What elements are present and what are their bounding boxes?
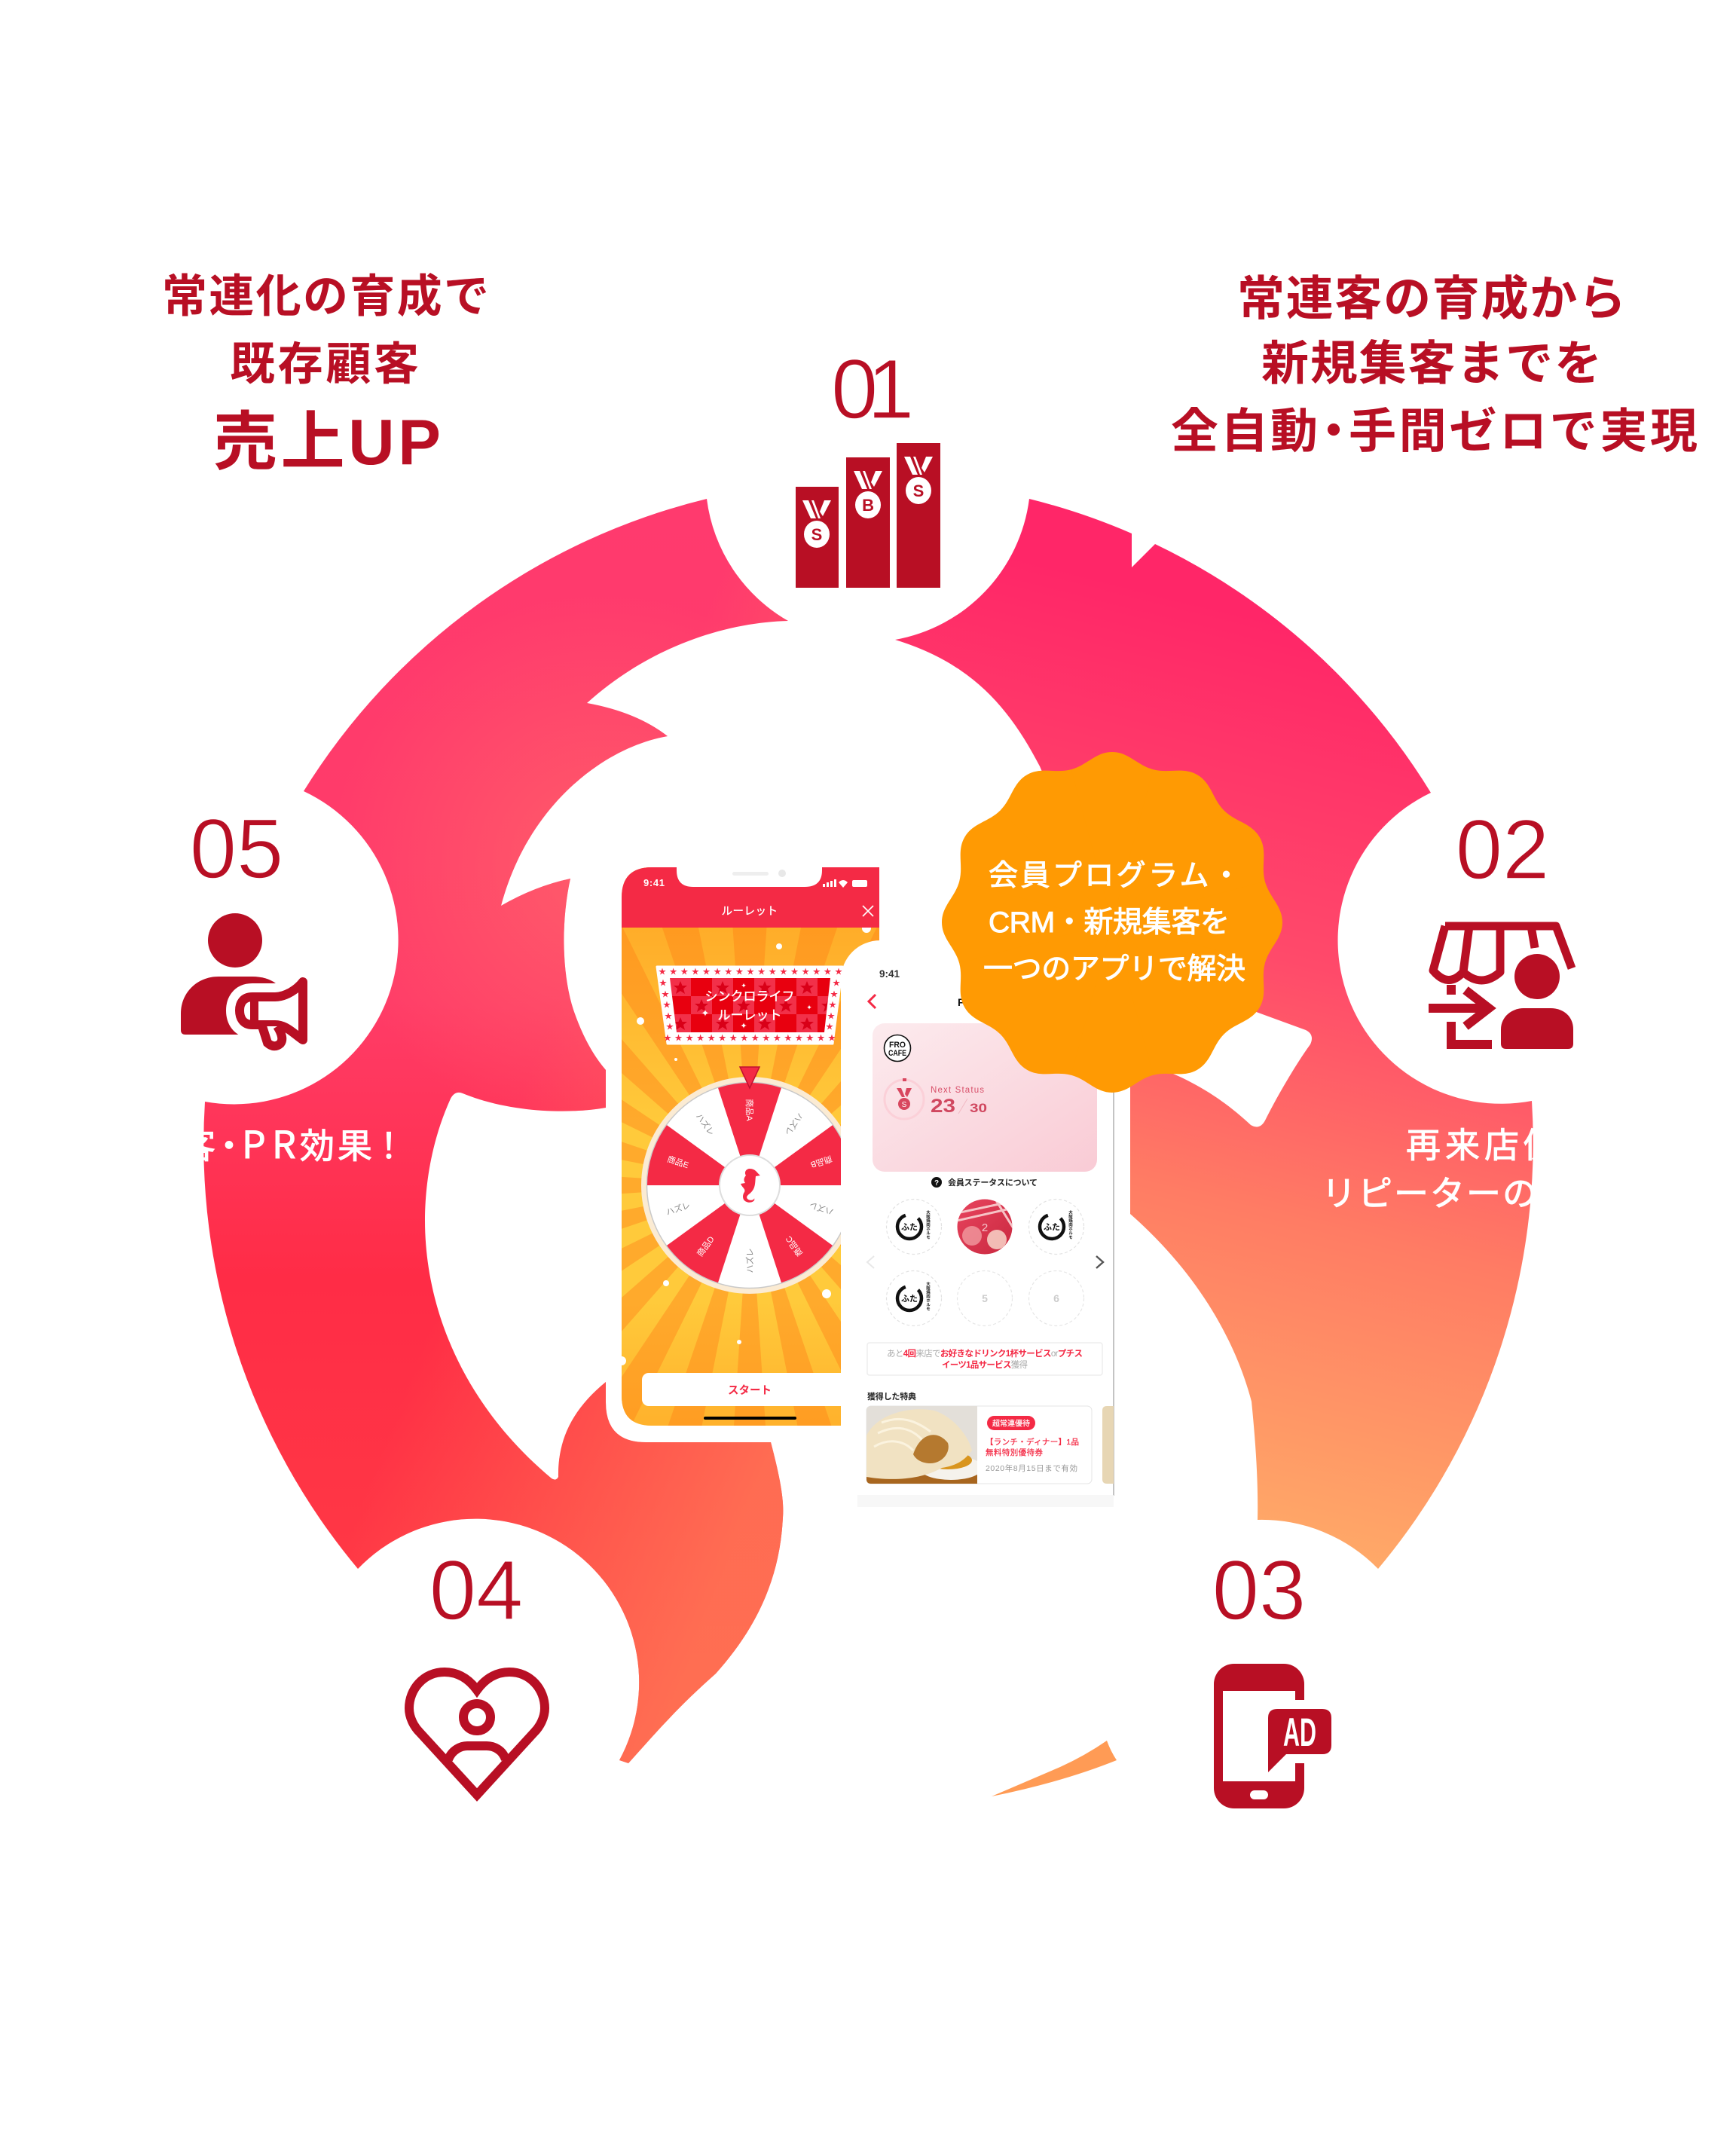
white label: repeat visit promotion: リピーターの獲得	[1322, 1174, 1611, 1213]
number 02: 02	[1456, 802, 1549, 897]
orange scalloped badge	[942, 752, 1282, 1093]
orange scalloped badge: CRM・新規集客を	[989, 906, 1230, 939]
orange scalloped badge: 一つのアプリで解決	[983, 953, 1245, 986]
number 04: 04	[429, 1543, 523, 1637]
right ring segment	[895, 499, 1533, 1569]
stamp 6: 6	[1053, 1292, 1059, 1304]
coupon card: 無料特別優待券	[986, 1448, 1043, 1457]
roulette background sunburst	[622, 867, 879, 1426]
stamp 6	[1029, 1270, 1083, 1326]
edge dot	[617, 1356, 626, 1365]
roulette banner: ★	[830, 991, 838, 999]
coupon expiry: 2020年8月15日まで有効	[986, 1463, 1077, 1473]
stamp 2 photo	[957, 1198, 1013, 1254]
shop logo: FRO	[889, 1041, 906, 1050]
roulette banner: ★	[663, 1001, 671, 1010]
phone white body	[841, 940, 1114, 1537]
hidden screen title: FRO CAFE	[958, 996, 1012, 1008]
heading: regular customer growth: 常連化の育成で	[162, 271, 489, 322]
phone: member status screen	[841, 940, 1114, 1537]
roulette wheel: ハズレ	[782, 1111, 805, 1138]
roulette wheel: ハズレ	[694, 1111, 717, 1138]
heading: automation message	[1171, 273, 1698, 458]
roulette banner: ✦	[740, 1022, 747, 1031]
medal B: B	[862, 496, 874, 515]
next coupon peek	[1102, 1406, 1114, 1484]
benefits heading: 獲得した特典	[867, 1391, 916, 1402]
heading: regular customer growth	[162, 271, 489, 478]
number 01: 01	[831, 342, 914, 436]
medal S high	[904, 457, 933, 504]
white label: new customers and PR effect	[68, 1115, 406, 1169]
home indicator	[704, 1417, 796, 1420]
medal B	[854, 471, 882, 518]
stamp 3	[1029, 1200, 1083, 1254]
roulette wheel: 商品C	[784, 1234, 805, 1258]
back chevron	[869, 995, 876, 1008]
orange sliver at bottom	[992, 1741, 1117, 1796]
medal S low	[802, 500, 831, 548]
white label: new customers and PR effect: 新規集客	[68, 1127, 219, 1166]
stamp 1: ふた	[901, 1222, 918, 1232]
coupon title: 【ランチ・ディナー】1品	[986, 1437, 1079, 1447]
icon: medal podium	[796, 443, 940, 588]
roulette header	[622, 867, 879, 928]
coupon card	[866, 1406, 1092, 1484]
status help link: 会員ステータスについて	[948, 1177, 1038, 1188]
roulette wheel: ハズレ	[665, 1200, 692, 1218]
icon: store visit	[1429, 926, 1573, 1049]
number 05: 05	[190, 802, 283, 896]
bottom navigation strip	[857, 1495, 1114, 1507]
icon: person with megaphone	[181, 913, 303, 1046]
phone right edge line	[1113, 1055, 1114, 1496]
shop logo	[885, 1035, 910, 1061]
heading: regular customer growth: 既存顧客	[230, 339, 419, 390]
phone: roulette screen	[622, 867, 879, 1426]
start button	[642, 1373, 891, 1406]
heading: regular customer growth: 売上UP	[213, 407, 441, 478]
medal S high: S	[913, 481, 924, 500]
stamp 4: ふた	[901, 1294, 918, 1304]
previous chevron	[867, 1256, 874, 1268]
heading: automation message: 手間ゼロで実現	[1349, 405, 1698, 458]
roulette banner	[657, 967, 842, 1044]
coupon food photo	[866, 1406, 983, 1484]
status help link: ?	[934, 1179, 939, 1188]
icon: phone advertisement: AD	[1283, 1710, 1316, 1755]
roulette banner: ★	[666, 1023, 674, 1032]
status medal ring: S	[902, 1101, 907, 1109]
infographic canvas	[165, 273, 1697, 1808]
heading: automation message: 全自動	[1171, 405, 1318, 458]
stamp 3: 大阪焼肉ホルモ	[1068, 1209, 1073, 1240]
white arrow notch in right segment	[1130, 980, 1312, 1127]
shop logo: CAFE	[888, 1049, 906, 1058]
number 03: 03	[1212, 1543, 1306, 1637]
status count: 30	[970, 1101, 987, 1115]
stamp 4: 大阪焼肉ホルモ	[925, 1281, 931, 1311]
notch	[677, 863, 822, 887]
roulette banner: ✦	[806, 1004, 812, 1011]
white label: new customers and PR effect: ・	[212, 1127, 246, 1166]
white label: new customers and PR effect: 効果！	[300, 1127, 406, 1166]
start button: スタート	[728, 1384, 772, 1397]
roulette banner: ★	[826, 1023, 833, 1032]
roulette banner: ★	[665, 1013, 672, 1021]
wheel pointer	[740, 1067, 760, 1088]
stamp 3: ふた	[1044, 1222, 1060, 1232]
status icons	[823, 879, 867, 888]
heading: automation message: 新規集客までを	[1261, 338, 1602, 390]
stamp 5: 5	[982, 1292, 988, 1304]
left ring segment	[203, 499, 788, 1763]
roulette banner: ★	[662, 991, 669, 999]
roulette banner: ★	[827, 1013, 835, 1021]
status count	[931, 1096, 987, 1117]
roulette wheel: 商品B	[809, 1154, 833, 1169]
medal S low: S	[811, 525, 822, 544]
coupon tag: 超常連優待	[992, 1418, 1030, 1429]
heading: automation message: 常連客の育成から	[1237, 273, 1626, 326]
reward info box: イーツ1品サービス獲得	[942, 1359, 1028, 1370]
roulette banner: ★	[829, 1001, 836, 1010]
next chevron	[1096, 1256, 1103, 1268]
screen title: ルーレット	[722, 906, 778, 918]
stamp 5	[957, 1270, 1013, 1326]
roulette wheel: ハズレ	[744, 1248, 755, 1273]
roulette wheel: 商品A	[744, 1099, 754, 1121]
stamp 4	[886, 1270, 942, 1326]
white label: repeat visit promotion: 再来店促進で	[1406, 1126, 1641, 1165]
roulette wheel: 商品D	[695, 1234, 717, 1258]
heading: automation message: ・	[1310, 405, 1358, 458]
stamp 1	[886, 1200, 942, 1254]
roulette banner: ★★★★★★★★★★★★★★★★★	[659, 968, 842, 977]
next status text: Next Status	[931, 1086, 984, 1095]
roulette wheel: ハズレ	[808, 1200, 835, 1218]
stamp 1: 大阪焼肉ホルモ	[925, 1209, 931, 1240]
speaker and camera	[732, 870, 786, 877]
orange scalloped badge: 会員プログラム・	[989, 860, 1241, 892]
roulette wheel: 商品E	[666, 1154, 690, 1170]
stamp 2 photo: 2	[982, 1221, 988, 1234]
white label: repeat visit promotion	[1322, 1126, 1641, 1213]
icon: heart person	[409, 1672, 545, 1795]
status time: 9:41	[879, 968, 900, 980]
status count: 23	[931, 1096, 955, 1117]
roulette banner: シンクロライフ	[705, 989, 794, 1004]
roulette wheel	[641, 1077, 858, 1294]
reward info box: あと4回来店でお好きなドリンク1杯サービスorプチス	[887, 1348, 1083, 1359]
reward info box	[867, 1343, 1102, 1375]
roulette banner: ★	[833, 980, 840, 988]
roulette banner: ★★★★★★★★★★★★★★★★	[664, 1035, 836, 1043]
icon: phone advertisement	[1214, 1664, 1331, 1808]
status medal ring	[885, 1078, 924, 1119]
roulette banner: ルーレット	[717, 1008, 782, 1023]
coupon tag	[987, 1416, 1035, 1430]
roulette banner: ★	[659, 980, 667, 988]
status card	[873, 1023, 1097, 1172]
roulette banner: ✦	[701, 1007, 710, 1019]
roulette banner: ✦	[741, 982, 747, 989]
status time: 9:41	[643, 877, 665, 888]
close icon	[863, 906, 873, 916]
white label: new customers and PR effect: PR	[242, 1115, 296, 1169]
